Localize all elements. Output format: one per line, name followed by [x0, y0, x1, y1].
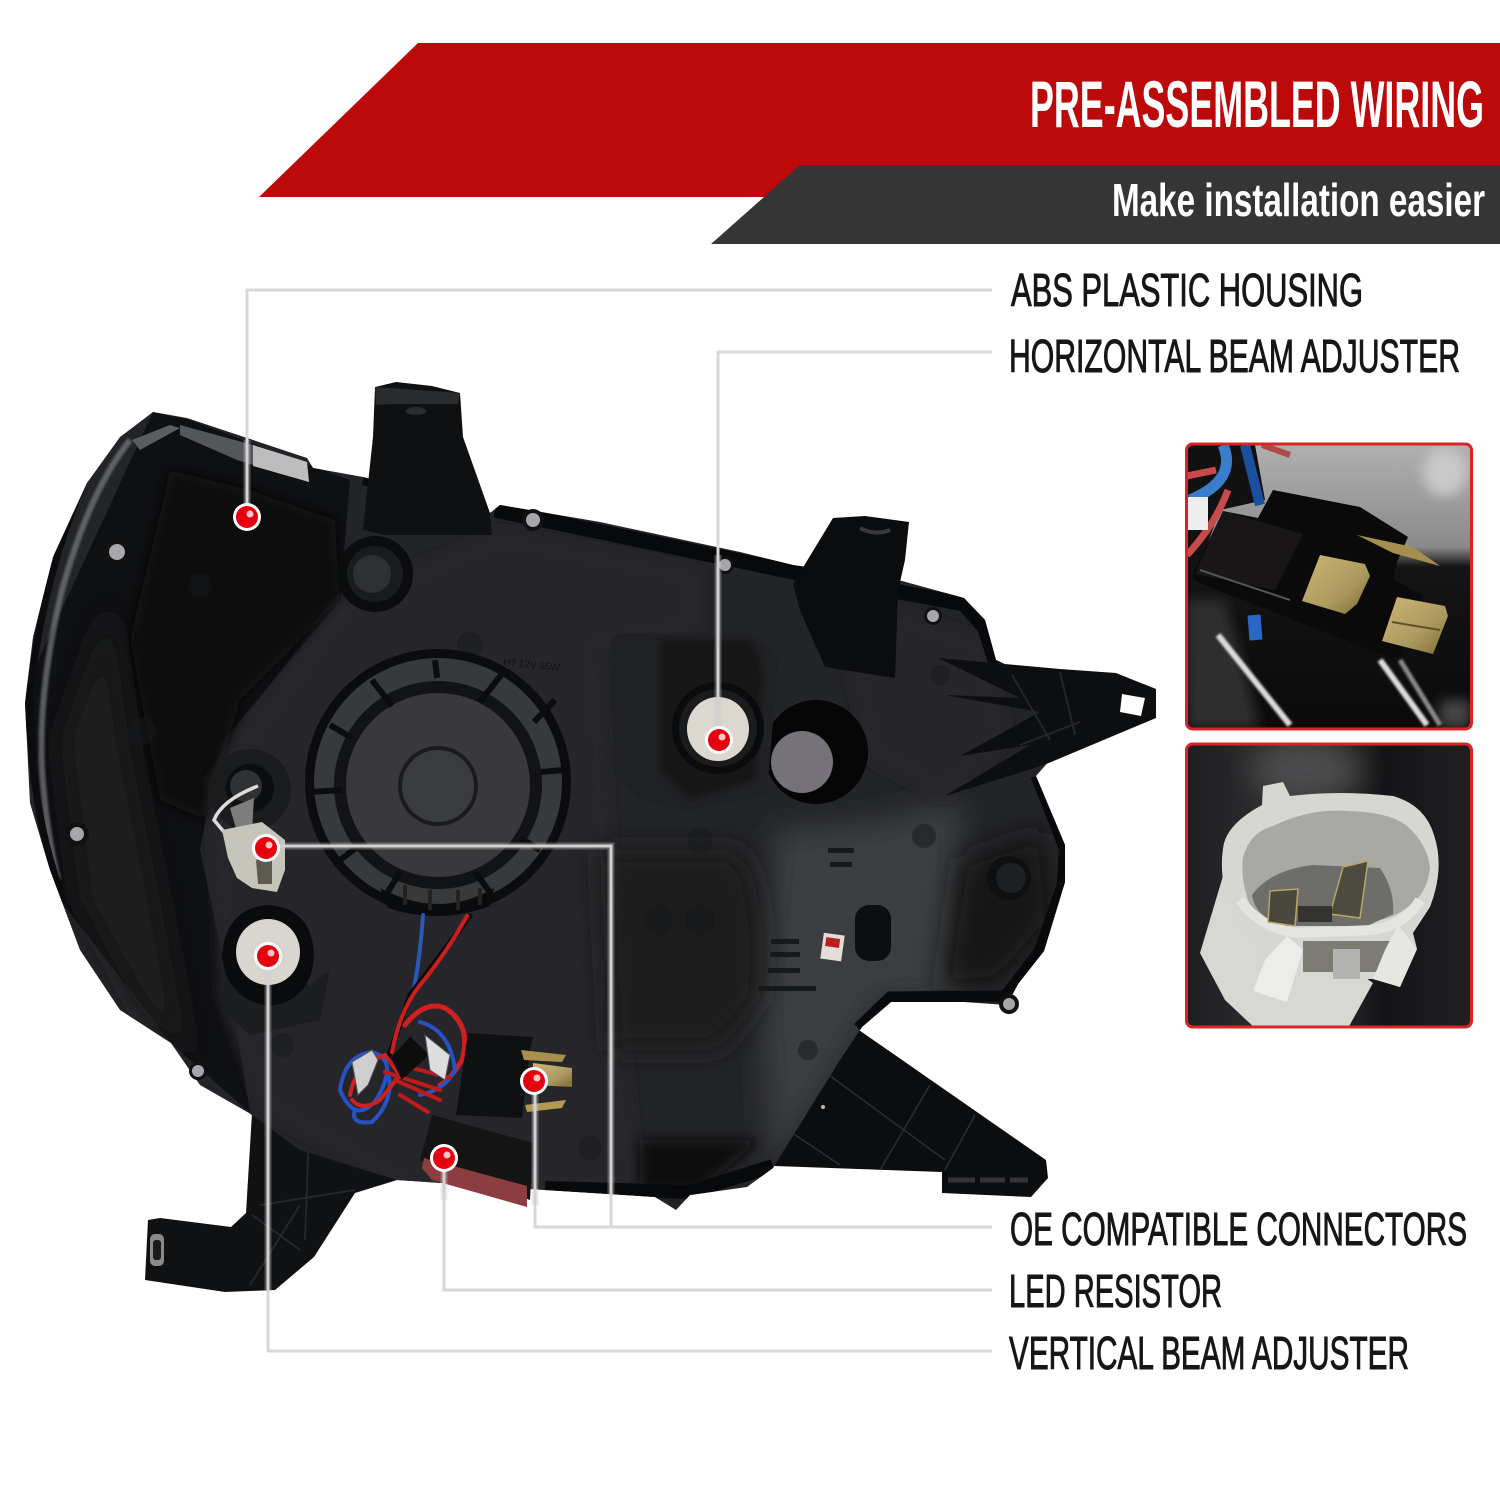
upper lens window — [180, 425, 309, 482]
connector neck — [1200, 876, 1373, 1030]
marker dot: resistor — [430, 1144, 458, 1172]
label: LED resistor: LED RESISTOR — [1009, 1265, 1222, 1317]
contact pins — [1268, 889, 1298, 926]
headlight photo illustration — [20, 382, 1156, 1292]
adjuster housing block — [611, 633, 778, 811]
lens rim highlights — [41, 440, 130, 880]
main housing body — [25, 412, 1065, 1210]
horizontal adjuster socket — [672, 682, 764, 774]
right tab bracket — [938, 658, 1156, 796]
moulded label text area — [758, 848, 854, 991]
right pin — [987, 856, 1031, 900]
lower left mounting bracket — [145, 1055, 397, 1292]
marker dot: vertical adjuster — [254, 942, 282, 970]
marker dot: H4 plug — [520, 1067, 548, 1095]
lower right mounting bracket — [705, 1028, 1048, 1197]
inset panel: H4 plug close-up — [1186, 444, 1472, 729]
connector line: OE compatible connectors — [272, 846, 992, 1227]
rim bands — [495, 510, 996, 664]
connector line: LED resistor — [444, 1168, 992, 1290]
marker dot: side connector — [252, 834, 280, 862]
marker dot: ABS housing — [233, 503, 261, 531]
banner: dark subheader — [711, 165, 1500, 244]
screws — [65, 509, 1019, 1080]
inner ring — [1242, 811, 1430, 925]
connector shell — [1222, 782, 1439, 1002]
side port hole — [764, 700, 868, 804]
side marker socket — [209, 749, 291, 831]
top adjuster pin — [337, 536, 413, 612]
top mounting tab left — [363, 382, 492, 535]
connector line: horizontal beam adjuster — [718, 352, 992, 730]
wiring harness — [340, 915, 470, 1122]
top mounting tab right — [793, 516, 909, 678]
front lip — [1240, 900, 1420, 933]
LED resistor box — [420, 1115, 533, 1207]
connector line: ABS plastic housing — [247, 290, 992, 505]
wires — [1190, 445, 1227, 500]
inset panel: OE connector close-up — [1186, 740, 1472, 1030]
lens side dark region — [20, 412, 350, 1113]
lit central shells — [206, 596, 604, 1194]
side slot — [855, 905, 891, 961]
H4 plug connector — [456, 1033, 572, 1118]
brass blades — [1302, 555, 1370, 614]
vertical adjuster socket — [222, 905, 330, 1035]
side marker connector and wire — [214, 786, 285, 892]
background glints — [1423, 448, 1467, 496]
connector line glow over dark housing — [247, 440, 718, 1290]
banner: red header — [259, 43, 1500, 197]
plug body — [1194, 490, 1421, 610]
moulded wattage text: H7 12V 55W — [503, 657, 561, 674]
housing shading — [20, 412, 1065, 1192]
moulded circles — [128, 573, 950, 1160]
marker dot: horizontal adjuster — [705, 726, 733, 754]
connector line: vertical beam adjuster — [268, 966, 992, 1351]
bulb dust cap — [305, 649, 571, 916]
inner well — [1252, 865, 1393, 926]
retaining clip — [1303, 941, 1393, 972]
